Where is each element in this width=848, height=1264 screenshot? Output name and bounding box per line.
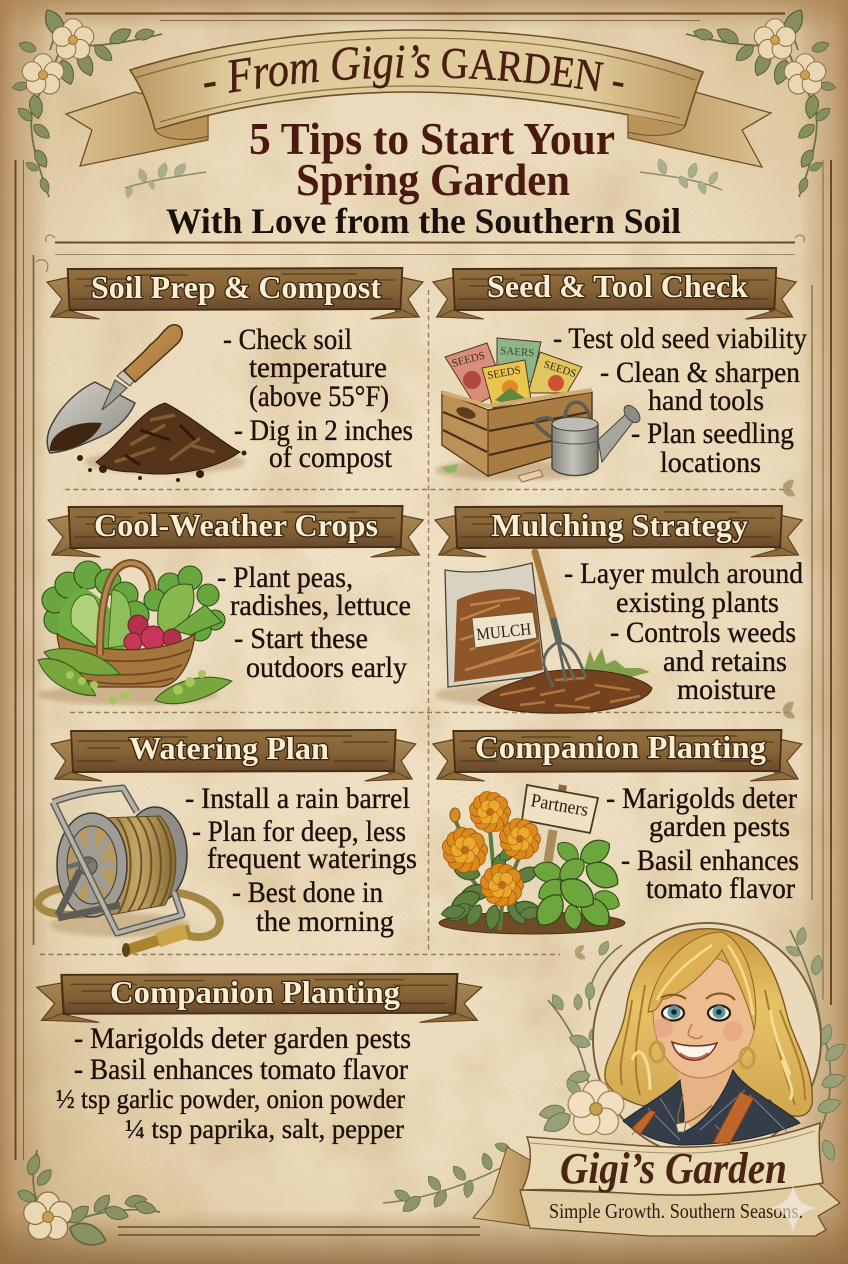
face <box>653 958 755 1078</box>
icon: seed crate and watering can: SAERS <box>500 345 535 359</box>
text: watering tips: - Best done in <box>232 877 383 909</box>
icon: trowel and compost pile <box>47 325 246 482</box>
text: lower tips and measures: ½ tsp garlic powder, onion powder <box>56 1084 405 1114</box>
text: mulching tips: - Controls weeds <box>610 617 796 649</box>
text: soil tips: - Dig in 2 inches <box>234 415 413 447</box>
text: companion tips: tomato flavor <box>646 873 795 905</box>
banner: cool-weather crops: Cool-Weather Crops <box>94 507 378 543</box>
text: companion tips: - Basil enhances <box>621 845 799 877</box>
portrait vines <box>538 926 848 1163</box>
banner: seed check <box>433 268 796 319</box>
panel: companion planting right <box>433 729 802 934</box>
text: seed tips: locations <box>660 447 761 479</box>
text: watering tips: frequent waterings <box>207 843 417 875</box>
text: seed tips <box>553 323 807 479</box>
text: soil tips: temperature <box>249 352 387 384</box>
banner: cool-weather crops <box>48 506 423 557</box>
text: lower tips and measures: ¼ tsp paprika, salt, pepper <box>125 1114 404 1144</box>
icon: hose reel <box>38 788 220 957</box>
banner: companion planting lower: Companion Planting <box>110 974 400 1010</box>
earrings and necklace <box>650 1042 754 1132</box>
icon: seed crate and watering can: SEEDS <box>486 364 522 382</box>
panel: soil prep and compost <box>47 268 423 482</box>
panel: cool-weather crops <box>35 506 423 720</box>
text: seed tips: - Plan seedling <box>631 418 794 450</box>
text: soil tips: (above 55°F) <box>249 381 389 413</box>
text: crops tips: radishes, lettuce <box>230 590 411 622</box>
icon: seed crate and watering can: SEEDS <box>451 350 486 370</box>
hair back <box>605 929 812 1116</box>
left ribbon tail <box>473 1147 530 1226</box>
header ribbon: - From Gigi’s GARDEN - <box>204 45 624 93</box>
text: soil tips: - Check soil <box>223 324 352 356</box>
banner: companion planting <box>433 729 802 781</box>
text: soil tips: of compost <box>269 442 393 474</box>
ribbon main band <box>130 30 703 130</box>
brand name: Gigi’s Garden <box>560 1144 787 1193</box>
floral corner: top left <box>12 6 162 197</box>
header ribbon <box>64 29 772 168</box>
banner: soil prep: Soil Prep & Compost <box>91 269 381 305</box>
icon: seed crate and watering can <box>435 338 643 482</box>
suspenders <box>632 1092 754 1143</box>
banner: companion planting: Companion Planting <box>475 729 766 765</box>
icon: vegetable basket <box>35 561 232 720</box>
title: Spring Garden <box>296 154 570 205</box>
ribbon title <box>205 77 625 97</box>
text: companion tips <box>606 783 799 905</box>
icon: marigolds, basil and sign <box>439 785 625 934</box>
herb sprigs beside title <box>125 158 722 198</box>
sparkle mark <box>770 1185 816 1232</box>
text: companion tips: garden pests <box>649 811 790 843</box>
grass and mulch pile <box>584 648 650 682</box>
neck and shirt <box>672 1060 738 1135</box>
subtitle: With Love from the Southern Soil <box>166 201 681 241</box>
text: soil tips <box>223 324 413 474</box>
ribbon right tail <box>628 92 771 167</box>
text: watering tips <box>185 783 417 938</box>
text: lower tips and measures: - Marigolds deter garden pests <box>74 1023 411 1055</box>
text: crops tips: - Start these <box>234 623 368 655</box>
text: watering tips: - Plan for deep, less <box>192 816 406 848</box>
banner: soil prep <box>47 268 423 319</box>
text: companion tips: - Marigolds deter <box>606 783 797 815</box>
portrait oval frame <box>593 923 821 1157</box>
panel: watering plan <box>38 730 417 957</box>
floral corner: top right <box>686 6 836 197</box>
banner: companion planting lower <box>37 974 482 1022</box>
banner: mulching: Mulching Strategy <box>491 507 748 543</box>
banner: seed check: Seed & Tool Check <box>487 268 748 304</box>
text: mulching tips: moisture <box>677 674 776 706</box>
cheeks, nose and smile <box>653 1018 743 1060</box>
ribbon left tail <box>66 92 208 166</box>
text: lower tips and measures <box>56 1023 411 1144</box>
icon: marigolds, basil and sign: Partners <box>529 790 590 821</box>
floral corner: bottom left <box>16 1150 160 1250</box>
icon: mulch bag and fork <box>435 552 652 713</box>
text: mulching tips: - Layer mulch around <box>564 558 803 590</box>
flourish ornaments <box>573 477 797 962</box>
portrait: Gigi <box>593 923 821 1157</box>
text: watering tips: - Install a rain barrel <box>185 783 410 815</box>
text: mulching tips <box>564 558 803 706</box>
main ribbon band <box>522 1123 823 1195</box>
banner: mulching <box>435 506 802 557</box>
text: mulching tips: existing plants <box>616 587 779 619</box>
panel: mulching strategy <box>435 506 803 713</box>
flower beside portrait <box>568 1080 624 1135</box>
bangs <box>648 932 756 1030</box>
text: mulching tips: and retains <box>663 646 787 678</box>
title <box>249 113 615 205</box>
banner: watering plan: Watering Plan <box>129 730 329 766</box>
text: seed tips: hand tools <box>648 385 764 417</box>
title: 5 Tips to Start Your <box>249 113 615 164</box>
floral sprig left of lower ribbon <box>383 1141 511 1216</box>
text: seed tips: - Test old seed viability <box>553 323 807 355</box>
text: seed tips: - Clean & sharpen <box>600 357 800 389</box>
text: lower tips and measures: - Basil enhances tomato flavor <box>74 1054 408 1086</box>
banner: watering plan <box>51 730 416 781</box>
panel: seed and tool check <box>433 268 807 482</box>
text: crops tips: outdoors early <box>246 652 407 684</box>
icon: mulch bag and fork: MULCH <box>475 619 532 644</box>
text: crops tips <box>217 562 411 684</box>
text: watering tips: the morning <box>256 906 394 938</box>
eyes and brows <box>661 993 735 1020</box>
lower ribbon: Gigi's Garden <box>473 1123 840 1236</box>
panel: companion planting lower left <box>37 974 482 1144</box>
text: crops tips: - Plant peas, <box>217 562 353 594</box>
brand tagline: Simple Growth. Southern Seasons. <box>549 1199 803 1223</box>
second ribbon band <box>520 1183 840 1236</box>
icon: seed crate and watering can: SEEDS <box>542 358 578 380</box>
